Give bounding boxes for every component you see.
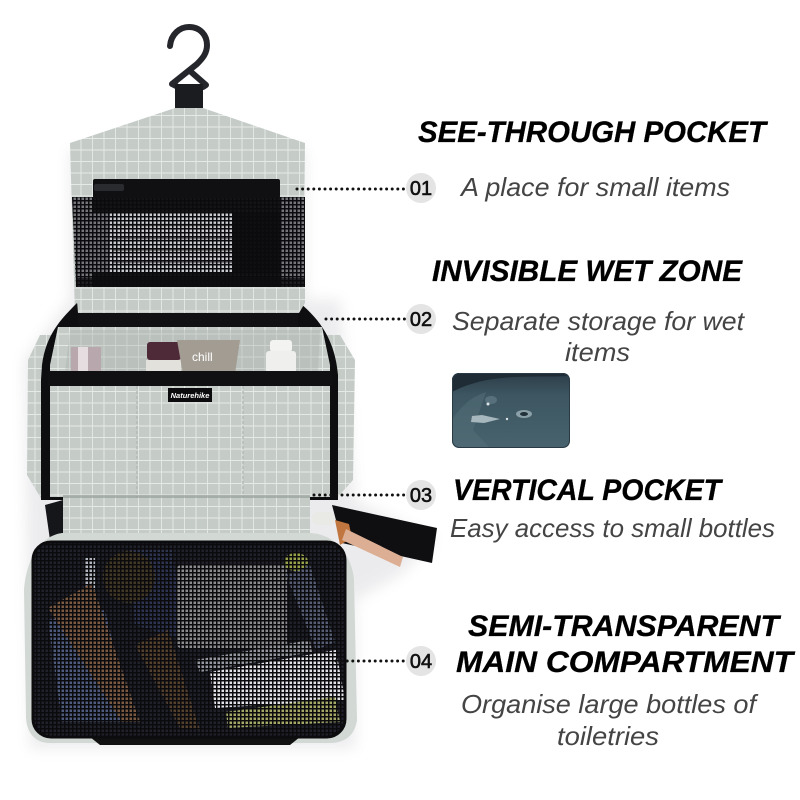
small grey cap xyxy=(86,558,95,590)
inner lining xyxy=(50,327,330,497)
bottles in vertical pocket: chill xyxy=(192,350,213,364)
stitched pocket dividers xyxy=(137,386,243,497)
outer side fabric xyxy=(27,335,355,500)
upper black trim xyxy=(78,313,298,327)
hanging bag illustration xyxy=(24,27,437,745)
brand label xyxy=(168,388,212,402)
blue bottle xyxy=(50,610,122,722)
icon: zipper strap and pull xyxy=(312,505,437,567)
callout 03 number badge xyxy=(406,480,436,510)
callout 02 number badge xyxy=(406,304,436,334)
fold crease xyxy=(63,495,310,498)
heading: vertical pocket: VERTICAL POCKET xyxy=(453,474,724,507)
heading: main compartment: SEMI-TRANSPARENT xyxy=(468,610,782,643)
main compartment xyxy=(24,533,357,745)
text: organise large bottles xyxy=(461,689,759,751)
round lid xyxy=(103,551,155,603)
heading: main compartment xyxy=(456,610,796,679)
text: separate storage: Separate storage for wet xyxy=(452,306,746,336)
flap bottom over frame xyxy=(76,288,305,313)
black zip frame xyxy=(41,303,338,500)
heading: see-through pocket: SEE-THROUGH POCKET xyxy=(418,116,769,149)
see-through pocket xyxy=(72,179,305,287)
text: separate storage xyxy=(452,306,746,367)
callout 04 number badge: 04 xyxy=(410,651,432,673)
tall bottle right xyxy=(286,565,335,650)
upper fold shading xyxy=(65,330,320,372)
heading: invisible wet zone: INVISIBLE WET ZONE xyxy=(432,255,743,288)
lower side straps xyxy=(45,500,63,540)
callout leader lines xyxy=(297,189,406,661)
callout 01 number badge: 01 xyxy=(410,178,432,200)
wet fabric photo xyxy=(452,373,570,448)
icon: hook xyxy=(170,27,207,108)
brown tube two xyxy=(135,630,200,730)
white bottle xyxy=(210,650,345,708)
brand label: Naturehike xyxy=(171,391,209,400)
text: organise large bottles: toiletries xyxy=(557,721,659,751)
callout 03 number badge: 03 xyxy=(410,485,432,507)
callout 02 number badge: 02 xyxy=(410,309,432,331)
pocket black band xyxy=(48,371,332,386)
text: separate storage: items xyxy=(565,337,630,367)
text: easy access: Easy access to small bottles xyxy=(450,513,775,543)
callout 04 number badge xyxy=(406,646,436,676)
callout 01 number badge xyxy=(406,173,436,203)
lower lining band xyxy=(63,497,310,540)
text: organise large bottles: Organise large bottles of xyxy=(461,689,759,719)
brown tube one xyxy=(48,583,140,722)
top flap xyxy=(70,108,305,315)
grey card xyxy=(177,565,287,648)
green bottle xyxy=(226,697,340,728)
bottles in vertical pocket xyxy=(71,340,296,374)
text: small items: A place for small items xyxy=(459,172,730,202)
soft bag shadow xyxy=(24,150,435,748)
heading: main compartment: MAIN COMPARTMENT xyxy=(456,646,796,679)
